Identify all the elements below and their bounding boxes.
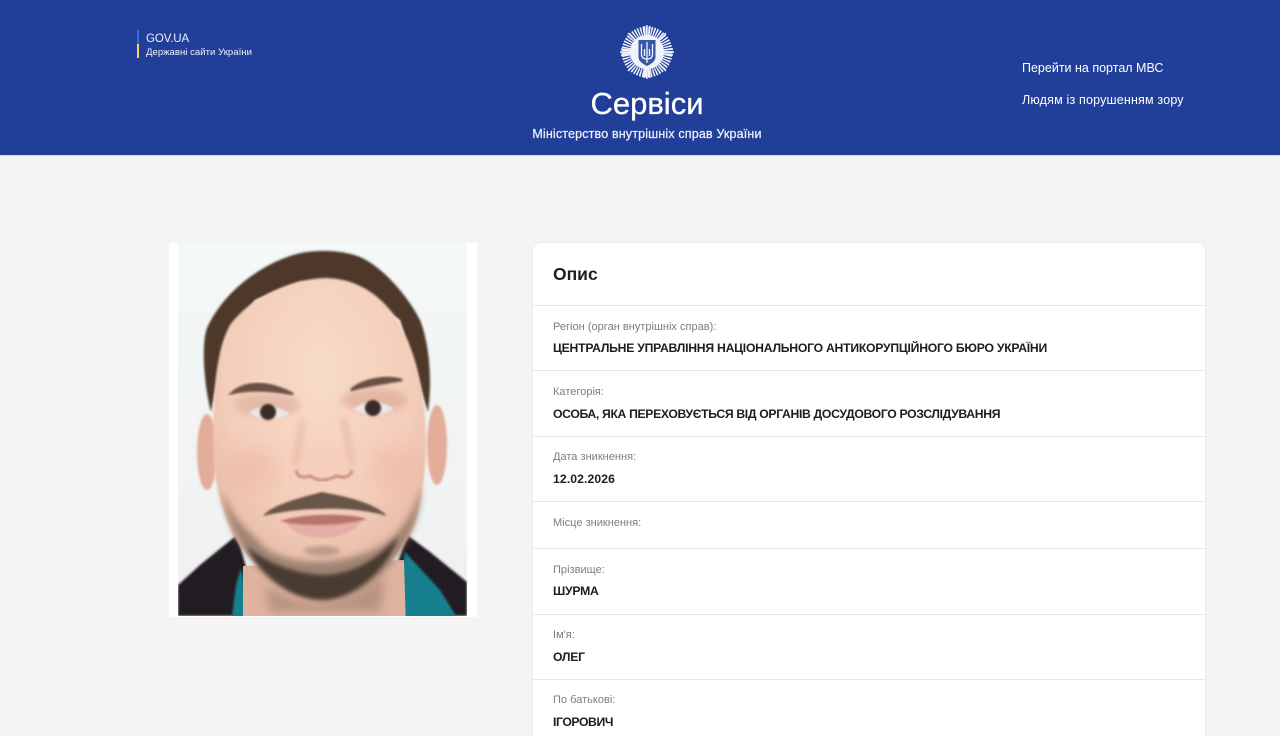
field: date: 12.02.2026 [553,472,615,486]
ministry name: Міністерство внутрішніх справ України [532,127,762,141]
jacket [178,535,467,616]
field: first name [533,614,1205,679]
field: patronymic: По батькові: [553,694,615,706]
neck [243,560,406,616]
cheeks [234,451,274,487]
neck stubble [265,575,385,612]
gov.ua text: GOV.UA [146,33,189,45]
field: region [533,305,1205,370]
panel: description card [533,243,1205,736]
nose [294,445,352,479]
eye sockets [235,393,301,417]
field: first name: Ім'я: [553,629,575,641]
header bar [0,0,1280,156]
beard [246,536,398,600]
icon: police star emblem [620,25,674,79]
left eye [249,406,290,419]
site title: Сервіси [590,86,704,121]
photo background [178,243,467,616]
right eye [353,402,394,415]
field: first name: ОЛЕГ [553,650,585,664]
soul patch [304,546,340,556]
gov.ua logo [137,30,252,58]
field: date [533,436,1205,501]
hair [204,251,430,412]
gov.ua caption: Державні сайти України [146,47,252,58]
teal collar [232,552,456,616]
card heading: Опис [553,264,598,284]
field: region: Регіон (орган внутрішніх справ): [553,321,716,333]
jaw stubble [222,485,422,598]
field: surname [533,548,1205,614]
moustache [263,492,387,516]
field: surname: ШУРМА [553,584,599,598]
field: category [533,370,1205,436]
flag stripe [137,30,139,58]
field: place [533,501,1205,548]
field: date: Дата зникнення: [553,451,636,463]
ears [197,414,217,490]
field: patronymic: ІГОРОВИЧ [553,715,613,729]
field: patronymic [533,679,1205,736]
face [213,278,426,598]
field: category: ОСОБА, ЯКА ПЕРЕХОВУЄТЬСЯ ВІД ОРГАНІВ ДОСУДОВОГО РОЗСЛІДУВАННЯ [553,407,1000,421]
field: place: Місце зникнення: [553,517,641,529]
lower lip [285,521,362,538]
portrait photo [169,243,477,617]
field: surname: Прізвище: [553,564,605,576]
eyebrows [232,384,293,394]
link: accessibility: Людям із порушенням зору [1022,93,1184,107]
upper lip [280,515,367,525]
link: MVS portal: Перейти на портал МВС [1022,61,1163,75]
field: region: ЦЕНТРАЛЬНЕ УПРАВЛІННЯ НАЦІОНАЛЬНОГО АНТИКОРУПЦІЙНОГО БЮРО УКРАЇНИ [553,341,1047,355]
field: category: Категорія: [553,386,604,398]
